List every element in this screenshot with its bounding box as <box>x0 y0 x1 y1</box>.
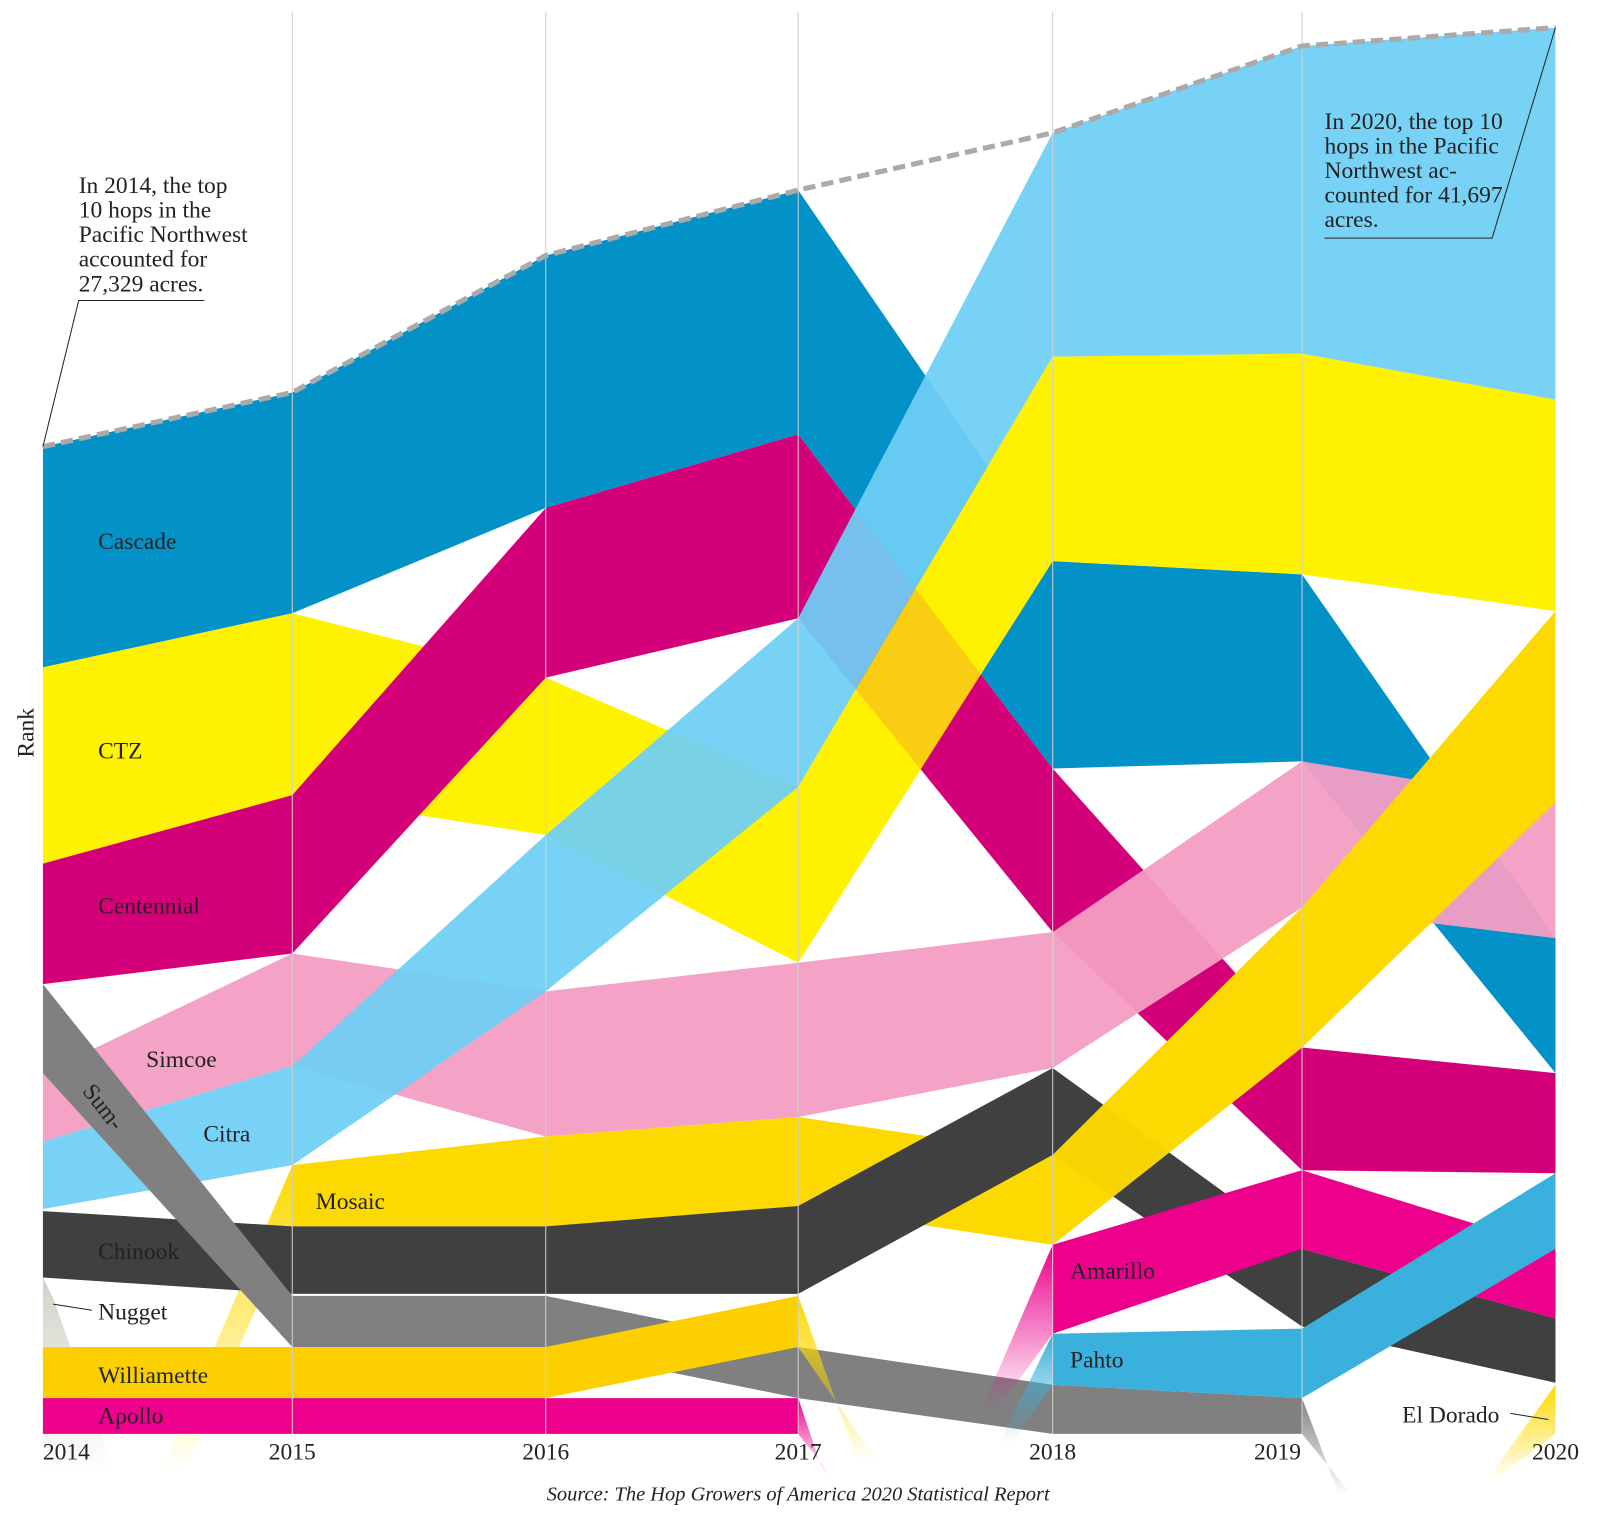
band labels: Centennial <box>98 894 200 920</box>
year axis labels: 2017 <box>775 1439 822 1465</box>
band labels: Pahto <box>1070 1347 1124 1373</box>
annotation: 2014 total: In 2014, the top <box>79 173 228 199</box>
band labels: Nugget <box>98 1299 168 1325</box>
annotation: 2020 total: In 2020, the top 10 <box>1325 109 1503 135</box>
band labels: Citra <box>203 1122 251 1148</box>
band labels <box>77 529 1499 1430</box>
band: Mosaic overlap segment <box>1053 908 1302 1245</box>
band labels: Cascade <box>98 529 176 555</box>
band: Nugget <box>43 1278 114 1472</box>
band: Amarillo <box>981 1170 1555 1410</box>
annotation: 2014 total: accounted for <box>79 247 207 273</box>
band: CTZ crossing segment <box>798 357 1053 963</box>
annotation: 2014 total: 10 hops in the <box>79 198 211 224</box>
band labels: Apollo <box>98 1404 163 1430</box>
source: Source: The Hop Growers of America 2020 Statistical Report <box>547 1483 1051 1505</box>
annotation: 2014 total: 27,329 acres. <box>79 271 203 297</box>
band: Mosaic tail <box>161 1165 292 1472</box>
band: Cascade <box>43 190 1555 1073</box>
band: Citra <box>43 28 1555 1209</box>
band: El Dorado <box>1487 1385 1555 1480</box>
band labels: El Dorado <box>1402 1403 1499 1429</box>
band: CTZ <box>43 354 1555 963</box>
annotation: 2020 total <box>1325 28 1555 238</box>
annotation: 2020 total: hops in the Pacific <box>1325 133 1499 159</box>
year axis labels: 2014 <box>43 1439 90 1465</box>
total acreage dashed line <box>43 28 1555 447</box>
band: Williamette <box>43 1296 879 1464</box>
year axis labels: 2019 <box>1254 1439 1301 1465</box>
band labels: Williamette <box>98 1363 208 1389</box>
band labels: Chinook <box>98 1239 179 1265</box>
band labels: Simcoe <box>146 1047 217 1073</box>
axis title: Rank: Rank <box>14 708 40 758</box>
band: Simcoe <box>43 761 1555 1142</box>
year axis labels <box>43 1439 1579 1465</box>
annotation: 2020 total: counted for 41,697 <box>1325 182 1503 208</box>
band labels: CTZ <box>98 738 143 764</box>
band: Centennial <box>43 434 1555 1173</box>
year axis labels: 2018 <box>1029 1439 1076 1465</box>
annotation: 2020 total: Northwest ac- <box>1325 158 1457 184</box>
year axis labels: 2020 <box>1532 1439 1579 1465</box>
year axis labels: 2015 <box>269 1439 316 1465</box>
annotation: 2014 total: Pacific Northwest <box>79 222 248 248</box>
band: Summit <box>43 984 1351 1494</box>
band labels: Sum- <box>77 1079 129 1135</box>
annotation: 2020 total: acres. <box>1325 207 1379 233</box>
band: Apollo <box>43 1398 830 1474</box>
band labels: Mosaic <box>316 1189 385 1215</box>
band: Pahto <box>1000 1173 1555 1443</box>
band: Chinook <box>43 1068 1555 1383</box>
year axis labels: 2016 <box>522 1439 569 1465</box>
band: Mosaic <box>292 611 1555 1245</box>
annotation: 2014 total <box>43 173 248 447</box>
band labels: Amarillo <box>1070 1259 1155 1285</box>
